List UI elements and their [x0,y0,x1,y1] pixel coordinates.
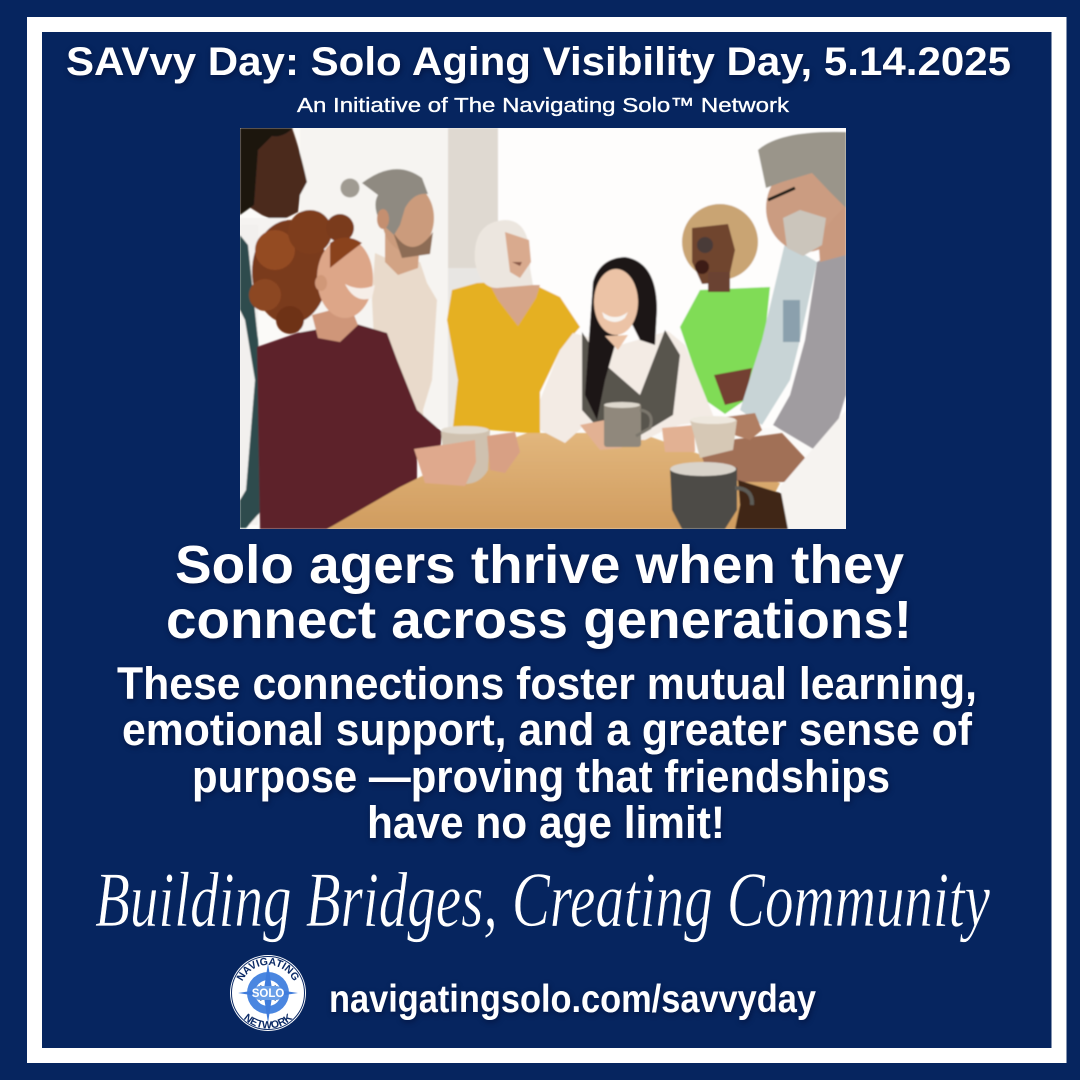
person: bearded man with glasses and gray shirt [700,132,846,482]
person: woman with red curly hair in burgundy sweater [249,210,442,529]
body text: emotional support, and a greater sense of [122,704,973,755]
subtitle: An Initiative of The Navigating Solo™ Network [297,94,790,117]
logo: Navigating Solo Network compass seal: NAVIGATING [236,958,299,981]
person: man at left edge [240,128,307,528]
mug: dark gray mug in foreground [670,462,752,529]
website url: navigatingsolo.com/savvyday [329,978,816,1021]
main heading [166,535,912,650]
title: SAVvy Day: Solo Aging Visibility Day, 5.14.2025 [66,40,1011,84]
logo: Navigating Solo Network compass seal [230,955,306,1031]
table [327,433,780,529]
mug: beige mug on table [690,416,737,458]
body text: These connections foster mutual learning, [117,658,977,709]
room background [300,128,846,428]
photo: friends of different generations around a table [240,128,846,529]
person: woman in green shirt [680,204,770,414]
person: white sleeve and dark hand at lower right [735,410,846,529]
main heading: Solo agers thrive when they [175,535,904,595]
person: gray-haired man with bun [340,169,437,460]
mug: cream mug held by red-haired woman [414,426,520,486]
body text: purpose —proving that friendships [192,751,890,802]
main heading: connect across generations! [166,590,912,650]
logo: Navigating Solo Network compass seal: SOLO [252,988,284,1000]
body text [117,658,977,848]
logo: Navigating Solo Network compass seal: NETWORK [244,1013,293,1028]
person: laughing woman with long dark hair [540,257,715,452]
person: blonde woman in yellow sweater [447,220,580,434]
body text: have no age limit! [367,797,725,848]
